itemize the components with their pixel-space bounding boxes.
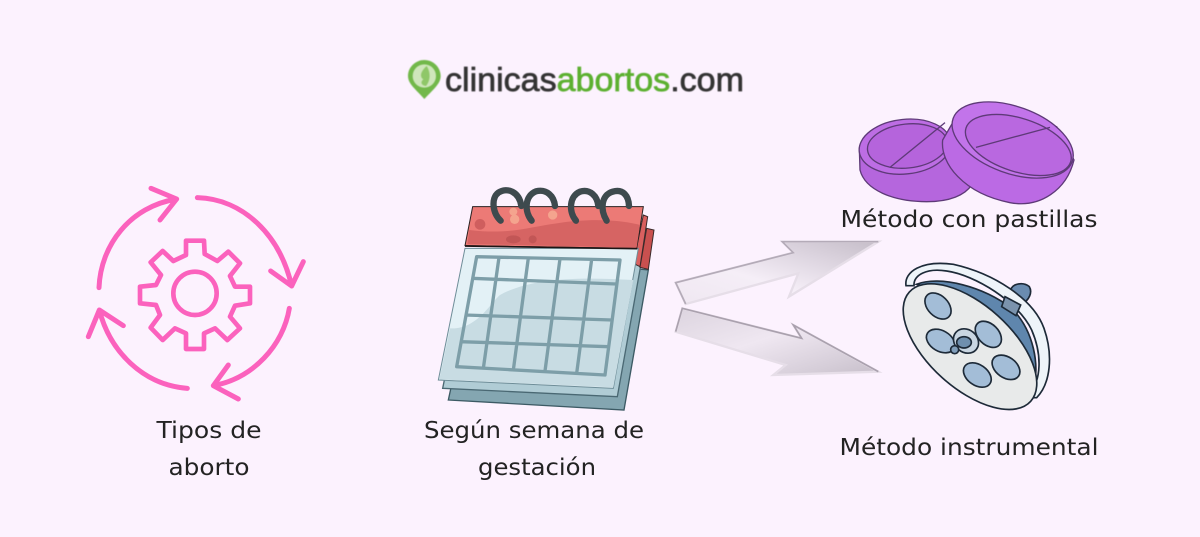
label: método con pastillas: Método con pastillas xyxy=(840,205,1098,233)
arrow: bottom right xyxy=(213,308,289,399)
right pill xyxy=(942,87,1084,204)
label: tipos de aborto: Tipos de xyxy=(155,416,262,444)
arrow: top left xyxy=(99,188,177,288)
arrow: lower xyxy=(676,308,878,375)
left pill xyxy=(856,115,972,202)
arrows: silver pair xyxy=(676,242,878,375)
lamp shell xyxy=(917,281,1036,392)
label: según semana de gestación: Según semana de xyxy=(424,416,644,444)
logo text: clinicasabortos.com xyxy=(445,61,744,98)
icon: pills xyxy=(856,87,1084,204)
icon: gear with circular arrows xyxy=(88,188,303,399)
label: tipos de aborto xyxy=(155,416,262,481)
rim clamp xyxy=(1002,297,1021,316)
label: método instrumental: Método instrumental xyxy=(840,433,1098,461)
icon: logo map pin xyxy=(408,60,441,99)
arrow: bottom left xyxy=(88,310,187,388)
label: según semana de gestación: gestación xyxy=(478,453,596,481)
arrow: top right xyxy=(197,198,303,286)
front page xyxy=(438,248,638,388)
label: tipos de aborto: aborto xyxy=(168,453,250,481)
lamp face xyxy=(881,261,1059,432)
icon: calendar xyxy=(438,190,654,410)
back pages xyxy=(448,253,648,410)
label: según semana de gestación xyxy=(424,416,644,481)
red tabs xyxy=(633,215,648,267)
spiral rings xyxy=(494,190,629,221)
lamp bulbs xyxy=(920,288,1024,392)
lamp hub xyxy=(949,324,983,358)
header xyxy=(465,207,643,248)
logo xyxy=(408,60,744,99)
arrow: upper xyxy=(676,242,878,304)
gear centre xyxy=(173,272,217,315)
gear xyxy=(140,241,250,349)
lamp handle xyxy=(1011,284,1031,304)
icon: surgical lamp xyxy=(881,261,1059,432)
lamp rim xyxy=(906,263,1049,398)
grid xyxy=(457,257,620,375)
